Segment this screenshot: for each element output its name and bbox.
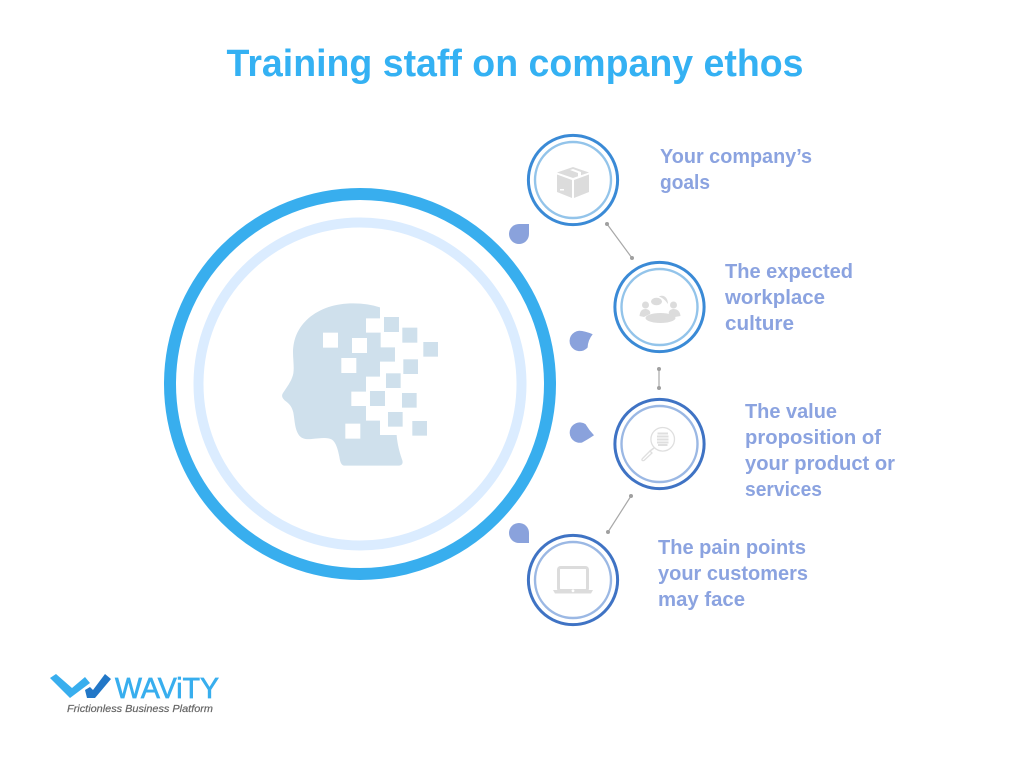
marker drop 1 <box>509 224 529 244</box>
text: step 2: workplace <box>724 287 825 309</box>
step 1 badge <box>528 135 618 225</box>
text: step 4: The pain points <box>658 537 806 559</box>
step 4 badge <box>528 535 618 625</box>
text: step 2 <box>724 261 853 335</box>
icon: laptop <box>553 568 593 594</box>
text: step 1: Your company’s <box>660 146 812 168</box>
marker drop 2 <box>570 331 593 351</box>
logo tagline: Frictionless Business Platform <box>67 704 213 715</box>
text: step 4: may face <box>658 589 745 611</box>
text: step 3: services <box>745 479 822 501</box>
text: step 3 <box>745 401 895 501</box>
text: step 3: proposition of <box>745 427 881 449</box>
text: step 1: goals <box>660 172 710 194</box>
connector 2 <box>657 367 661 390</box>
icon: magnifier with database <box>642 428 674 461</box>
text: step 4: your customers <box>658 563 808 585</box>
logo wordmark: WAViTY <box>115 673 219 705</box>
step 3 badge <box>615 399 704 489</box>
text: step 3: The value <box>745 401 837 423</box>
icon: logo check marks <box>50 674 111 698</box>
outer ring <box>170 194 550 574</box>
icon: meeting table <box>640 296 680 323</box>
text: step 3: your product or <box>745 453 895 475</box>
text: step 1 <box>660 146 812 194</box>
text: step 2: The expected <box>725 261 853 283</box>
step 2 badge <box>615 262 704 352</box>
icon: package box <box>557 167 589 198</box>
text: step 4 <box>658 537 808 611</box>
icon: pixelated head <box>282 303 438 466</box>
title: Training staff on company ethos <box>226 43 804 85</box>
text: step 2: culture <box>725 313 794 335</box>
marker drop 3 <box>570 422 594 443</box>
inner ring <box>198 222 522 546</box>
logo: Wavity <box>50 673 219 715</box>
connector 3 <box>606 494 633 534</box>
connector 1 <box>605 222 634 260</box>
marker drop 4 <box>509 523 529 543</box>
central head graphic <box>170 194 550 574</box>
